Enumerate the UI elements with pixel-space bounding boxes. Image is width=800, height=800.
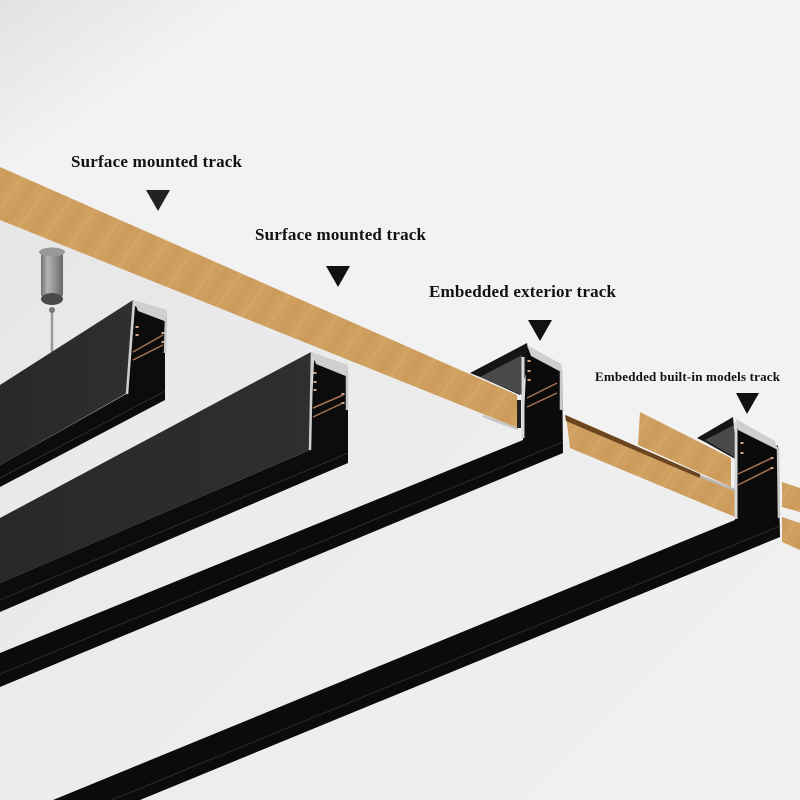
track 3 cut profile <box>523 345 563 438</box>
label: surface mounted track 1: Surface mounted track <box>71 152 243 171</box>
track 1 housing <box>0 306 165 487</box>
track 1 cut profile <box>127 300 167 394</box>
metal strip <box>700 476 735 490</box>
track 2: surface mounted <box>0 352 348 612</box>
label: embedded built-in models track: Embedded built-in models track <box>595 369 781 384</box>
label: embedded exterior track: Embedded exterior track <box>429 282 617 301</box>
dark slot <box>565 415 700 478</box>
marker triangle 1 <box>146 190 170 211</box>
track 3 inner face <box>480 355 522 395</box>
lower wood panel <box>566 415 735 517</box>
pendant hanger <box>39 248 65 352</box>
far right wood panels <box>782 482 800 512</box>
wooden ceiling beam <box>0 167 518 428</box>
right wood panels <box>565 412 800 550</box>
track 2 cut profile <box>310 352 348 450</box>
track 3 rail and profile <box>0 348 563 687</box>
marker triangle 2 <box>326 266 350 287</box>
track 3 wall trim <box>483 400 519 429</box>
track 4 cut profile <box>736 419 779 519</box>
marker triangle 4 <box>736 393 759 414</box>
track 4 inner face <box>705 425 734 457</box>
track 4 top housing <box>697 417 737 460</box>
track 3 top housing <box>470 343 530 395</box>
track 1: surface mounted with pendant <box>0 248 167 487</box>
track 4 rail and profile <box>53 425 780 800</box>
marker triangle 3 <box>528 320 552 341</box>
track 2 side face <box>0 352 311 583</box>
label: surface mounted track 2: Surface mounted track <box>255 225 427 244</box>
track 2 housing <box>0 360 348 612</box>
track 4: embedded built-in <box>53 417 780 800</box>
upper wood panel <box>638 412 731 487</box>
track 1 side face <box>0 300 133 465</box>
track 3: embedded exterior <box>0 343 563 687</box>
